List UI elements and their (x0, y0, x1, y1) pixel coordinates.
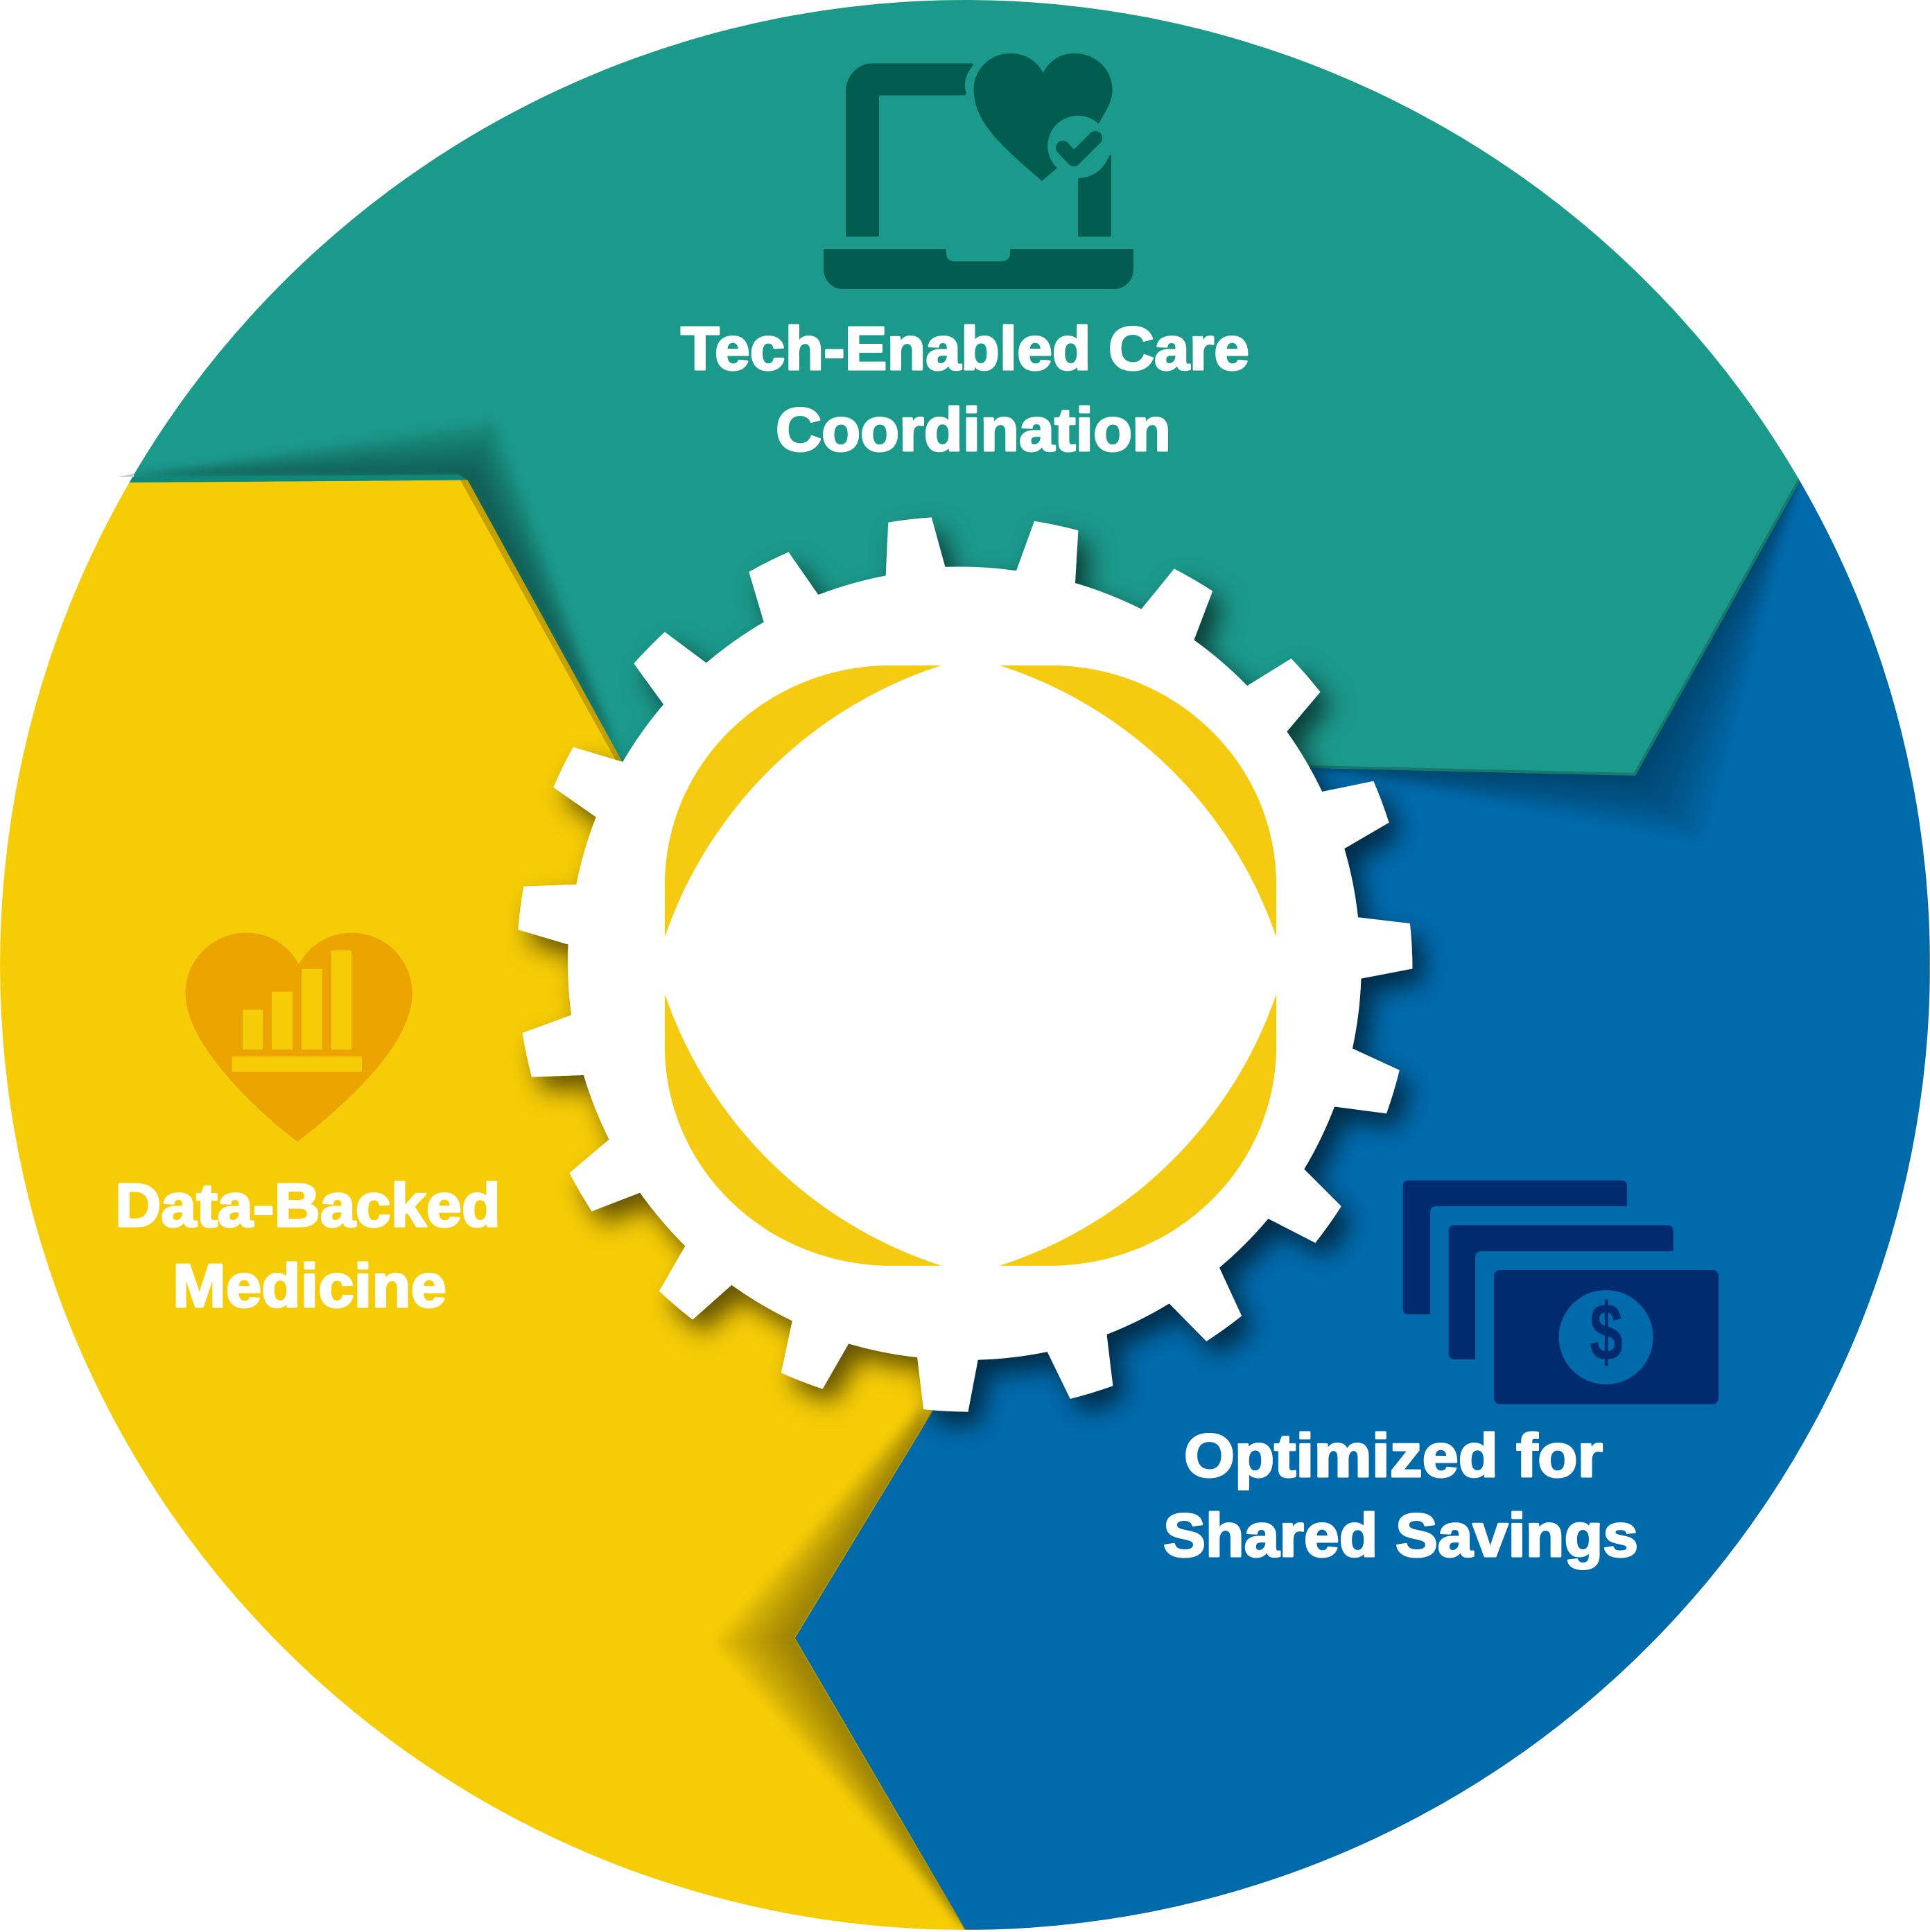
gear centre crescents (665, 665, 1276, 1266)
heading: optimized for shared savings: Shared Savings (1163, 1501, 1638, 1569)
gold strip along yellow edge (460, 480, 623, 763)
heading: tech-enabled care coordination (681, 314, 1249, 464)
heading: data-backed medicine (115, 1171, 501, 1320)
gear (518, 517, 1412, 1412)
heading: data-backed medicine: Medicine (173, 1251, 446, 1320)
panel: tech-enabled care coordination (teal) (129, 0, 1800, 773)
heading: tech-enabled care coordination: Tech-Enabled Care (681, 314, 1249, 383)
icon: stack of dollar bills: $ (1590, 1287, 1623, 1378)
heading: optimized for shared savings (1163, 1421, 1638, 1569)
faint shadow sliver outside wheel (118, 473, 134, 477)
icon: heart with bar chart (186, 933, 412, 1142)
shadow cast by blue panel on yellow panel (714, 1404, 965, 1930)
shadow cast by yellow panel on teal panel (118, 419, 623, 763)
heading: optimized for shared savings: Optimized for (1184, 1421, 1603, 1490)
panel: optimized for shared savings (blue) (794, 478, 1930, 1930)
heading: data-backed medicine: Data-Backed (115, 1171, 501, 1239)
shadow cast by teal panel on blue panel (1309, 478, 1800, 842)
teal panel dark edge (1309, 478, 1800, 774)
heading: tech-enabled care coordination: Coordination (776, 395, 1171, 464)
gear body (518, 517, 1412, 1412)
icon: stack of dollar bills (1403, 1181, 1719, 1404)
teal strip above yellow edge (130, 475, 467, 482)
icon: laptop with heart and check (824, 53, 1133, 289)
